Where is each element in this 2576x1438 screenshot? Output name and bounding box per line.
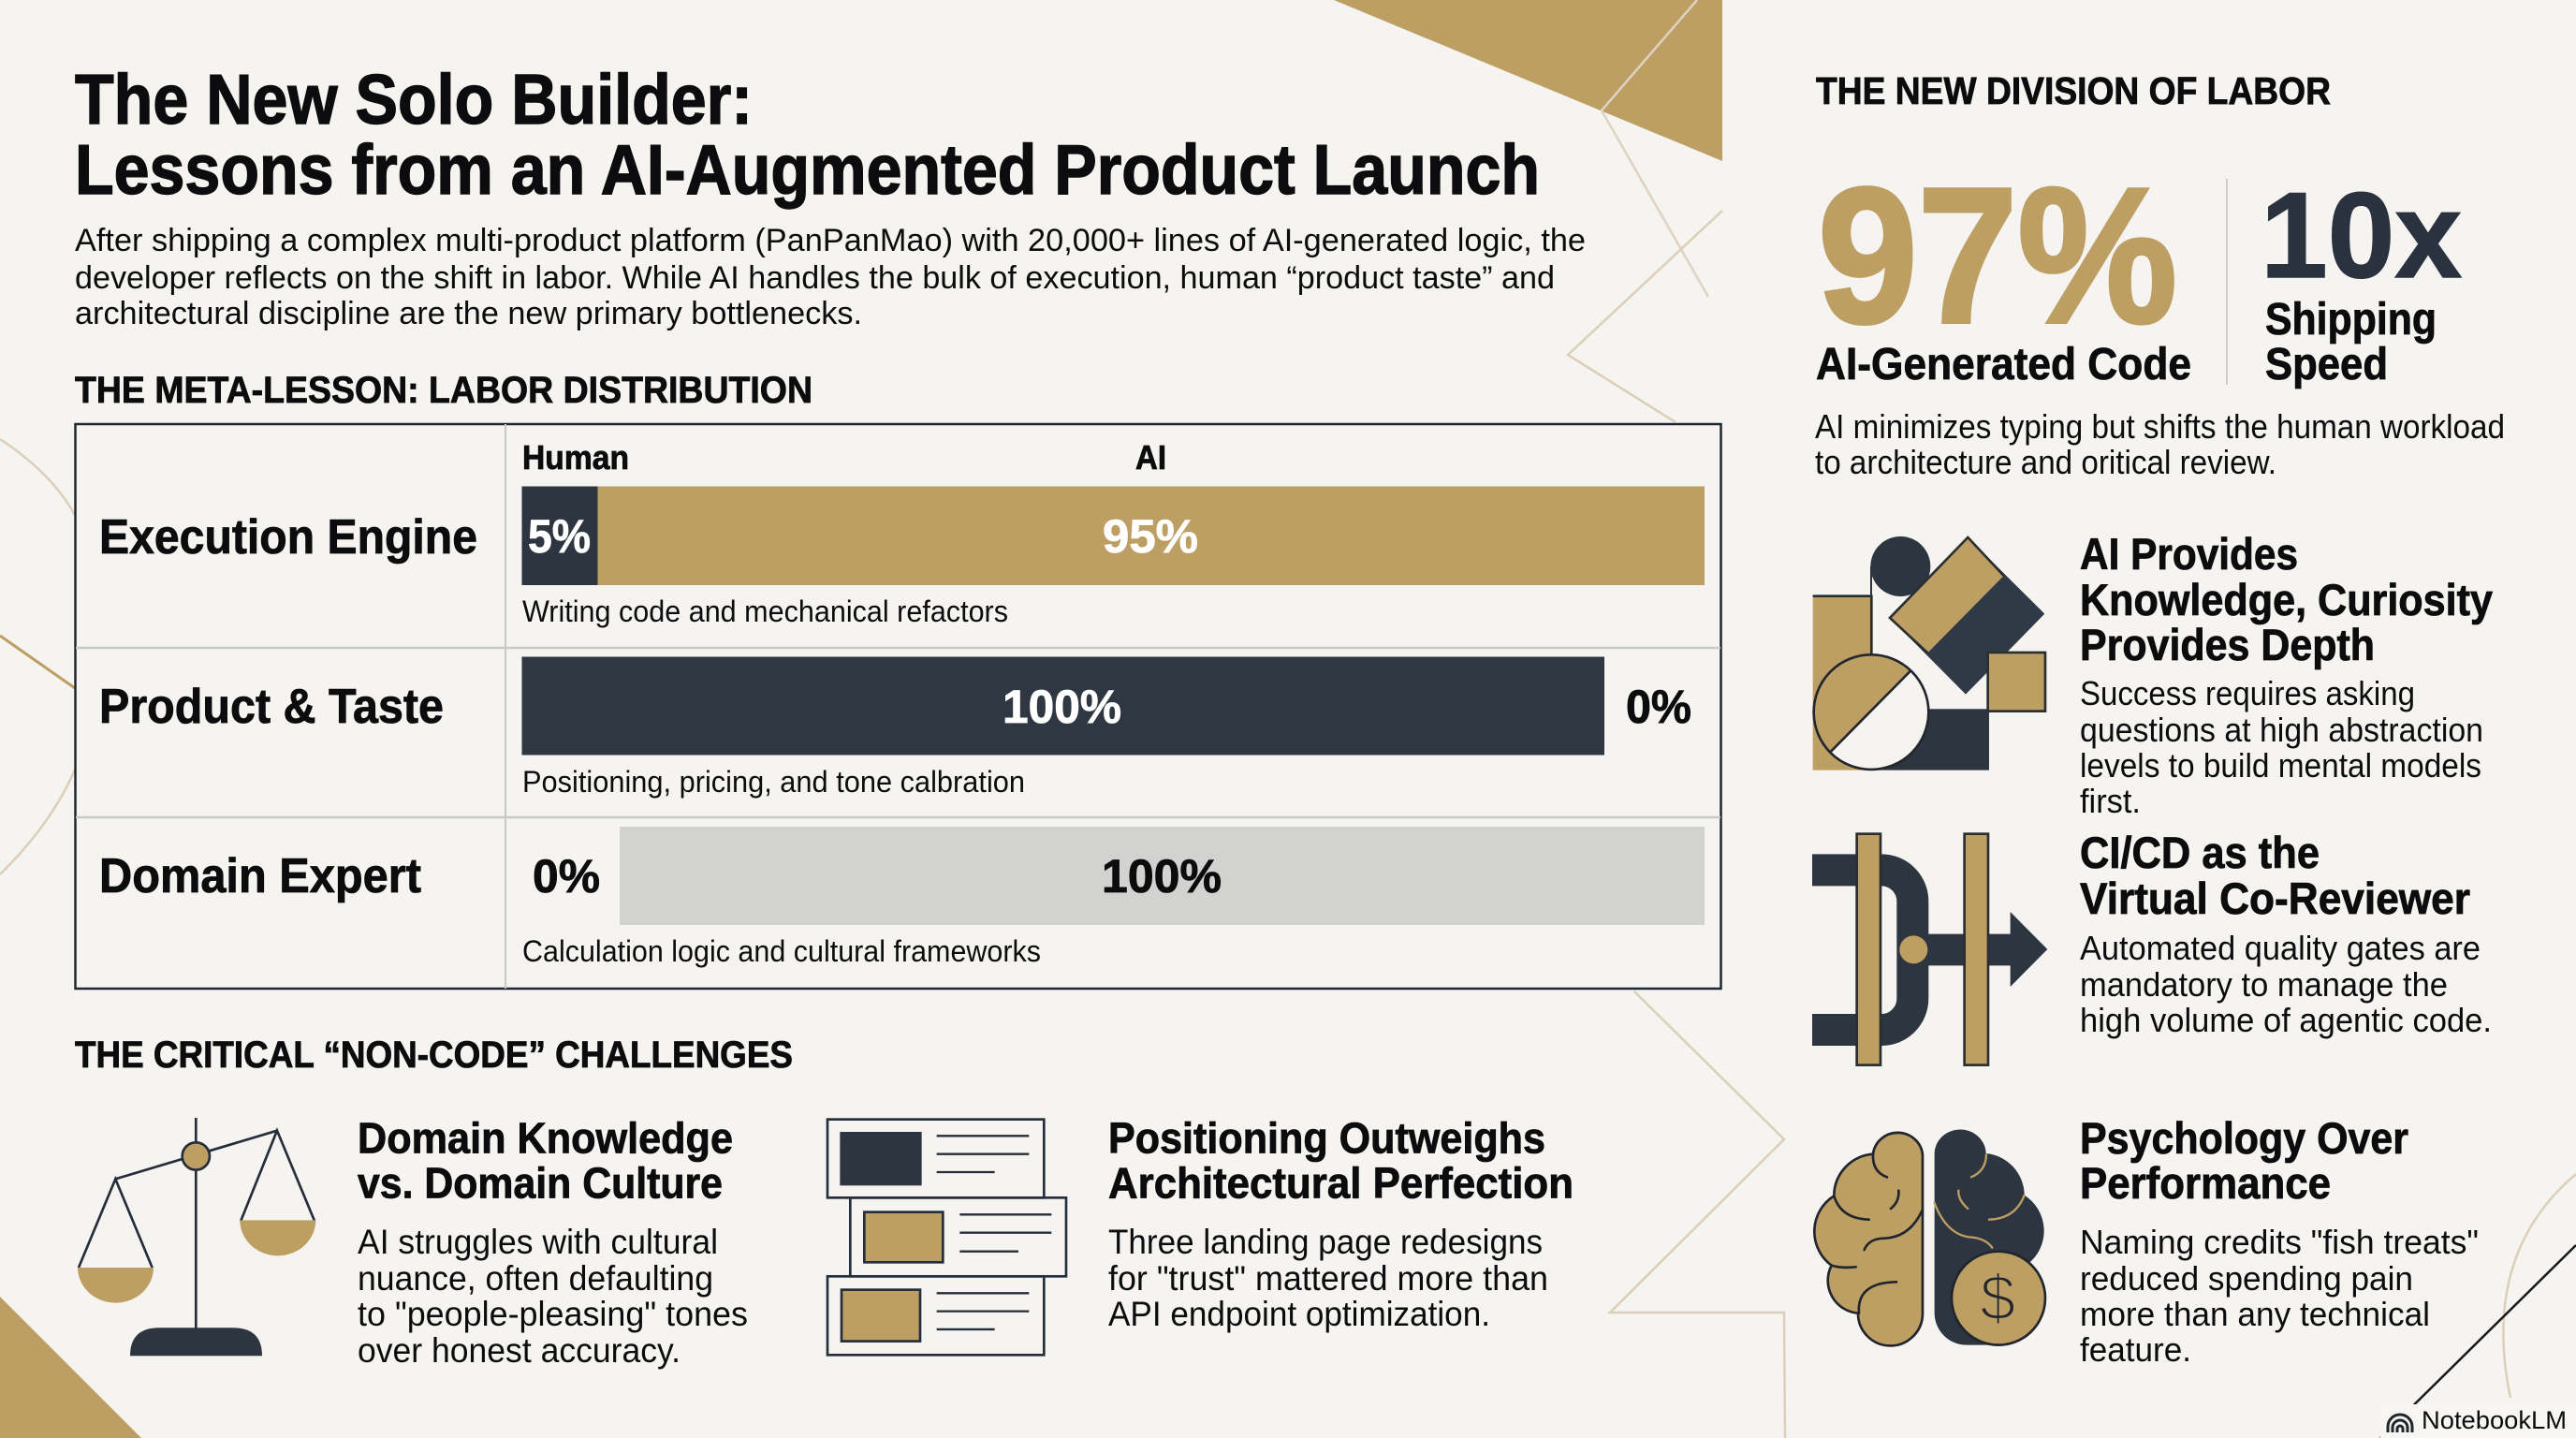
panel: labor distribution table: [75, 424, 1720, 989]
icon: CI/CD pipeline gates: [1812, 834, 2047, 1065]
intro paragraph: [75, 223, 1586, 331]
heading: meta-lesson: THE META-LESSON: LABOR DISTRIBUTION: [75, 370, 812, 411]
stat: 10x: Shipping: [2265, 295, 2437, 345]
item: AI provides knowledge: Success requires asking: [2080, 674, 2415, 712]
icon: balance scale: [78, 1118, 315, 1356]
challenge: positioning: for "trust" mattered more than: [1108, 1259, 1548, 1298]
row: execution engine: 5%: [528, 510, 591, 563]
intro paragraph: architectural discipline are the new primary bottlenecks.: [75, 296, 862, 331]
item: CI/CD as co-reviewer: [2080, 828, 2492, 1039]
watermark: NotebookLM: NotebookLM: [2422, 1406, 2567, 1434]
intro paragraph: developer reflects on the shift in labor. While AI handles the bulk of execution, human “product taste” and: [75, 260, 1555, 296]
stat: 97 percent: 97%: [1818, 148, 2177, 363]
challenge: positioning: API endpoint optimization.: [1108, 1295, 1490, 1333]
challenge: domain knowledge: Domain Knowledge: [358, 1114, 733, 1163]
item: psychology over performance: reduced spending pain: [2080, 1259, 2413, 1298]
icon: brain with coin: [1814, 1129, 2045, 1345]
row: execution engine: Execution Engine: [99, 510, 477, 565]
item: AI provides knowledge: first.: [2080, 782, 2141, 820]
item: CI/CD as co-reviewer: Virtual Co-Reviewer: [2080, 873, 2470, 923]
item: CI/CD as co-reviewer: mandatory to manage the: [2080, 965, 2448, 1004]
row: domain expert: 0%: [533, 850, 600, 902]
row: domain expert: [99, 827, 1705, 968]
row: domain expert: Domain Expert: [99, 849, 421, 903]
challenge: domain knowledge: [358, 1114, 748, 1370]
column labels: AI: [1135, 438, 1166, 477]
row: product and taste: 100%: [1003, 681, 1121, 733]
item: CI/CD as co-reviewer: Automated quality gates are: [2080, 929, 2481, 967]
column labels: Human: [522, 438, 629, 477]
item: AI provides knowledge: [2080, 529, 2493, 820]
title: Lessons from an AI-Augmented Product Launch: [75, 130, 1540, 209]
challenge: domain knowledge: to "people-pleasing" tones: [358, 1295, 748, 1333]
challenge: positioning: Positioning Outweighs: [1108, 1114, 1545, 1163]
stat: 97 percent: AI-Generated Code: [1816, 340, 2191, 389]
challenge: domain knowledge: AI struggles with cultural: [358, 1223, 718, 1261]
row: product and taste: 0%: [1626, 681, 1691, 733]
stat caption: AI minimizes typing but shifts the human workload: [1815, 407, 2505, 446]
icon: stacked landing pages: [827, 1120, 1066, 1355]
challenge: positioning: [1108, 1114, 1573, 1333]
table frame: [75, 424, 1720, 989]
item: AI provides knowledge: questions at high abstraction: [2080, 711, 2483, 749]
item: psychology over performance: Performance: [2080, 1158, 2331, 1208]
intro paragraph: After shipping a complex multi-product platform (PanPanMao) with 20,000+ lines of AI-generated logic, the: [75, 223, 1586, 258]
stat: 10x: [2261, 167, 2462, 389]
row: product and taste: Positioning, pricing, and tone calbration: [522, 765, 1025, 799]
row: execution engine: Writing code and mechanical refactors: [522, 594, 1008, 628]
icon: brain with coin: $: [1980, 1263, 2015, 1334]
icon: abstract geometric shapes: [1813, 536, 2045, 770]
item: CI/CD as co-reviewer: high volume of agentic code.: [2080, 1001, 2492, 1039]
heading: non-code challenges: THE CRITICAL “NON-CODE” CHALLENGES: [75, 1034, 793, 1076]
stat: 10x: 10x: [2261, 167, 2462, 303]
title: The New Solo Builder:: [75, 60, 753, 139]
item: psychology over performance: Psychology Over: [2080, 1113, 2408, 1163]
stat: 10x: Speed: [2265, 340, 2388, 389]
challenge: positioning: Architectural Perfection: [1108, 1159, 1573, 1208]
challenge: domain knowledge: over honest accuracy.: [358, 1331, 681, 1370]
row: domain expert: Calculation logic and cultural frameworks: [522, 934, 1041, 968]
item: psychology over performance: Naming credits "fish treats": [2080, 1223, 2479, 1261]
item: psychology over performance: [2080, 1113, 2479, 1369]
challenge: positioning: Three landing page redesigns: [1108, 1223, 1543, 1261]
item: psychology over performance: more than any technical: [2080, 1295, 2430, 1333]
item: AI provides knowledge: Provides Depth: [2080, 620, 2375, 669]
stat caption: to architecture and oritical review.: [1815, 443, 2276, 481]
heading: division of labor: THE NEW DIVISION OF LABOR: [1816, 69, 2331, 112]
challenge: domain knowledge: vs. Domain Culture: [358, 1159, 723, 1208]
title: [75, 60, 1540, 209]
item: AI provides knowledge: Knowledge, Curiosity: [2080, 575, 2493, 624]
column labels: [522, 438, 1166, 477]
row: product and taste: Product & Taste: [99, 680, 444, 734]
item: AI provides knowledge: levels to build mental models: [2080, 746, 2481, 785]
row: product and taste: [99, 657, 1691, 799]
row: execution engine: [99, 487, 1705, 628]
row: domain expert: 100%: [1102, 850, 1222, 902]
stat caption: [1815, 407, 2505, 481]
watermark: NotebookLM: [2380, 1404, 2576, 1438]
challenge: domain knowledge: nuance, often defaulting: [358, 1259, 713, 1298]
row: execution engine: 95%: [1103, 510, 1198, 563]
item: AI provides knowledge: AI Provides: [2080, 529, 2298, 579]
item: CI/CD as co-reviewer: CI/CD as the: [2080, 828, 2320, 877]
item: psychology over performance: feature.: [2080, 1330, 2191, 1369]
